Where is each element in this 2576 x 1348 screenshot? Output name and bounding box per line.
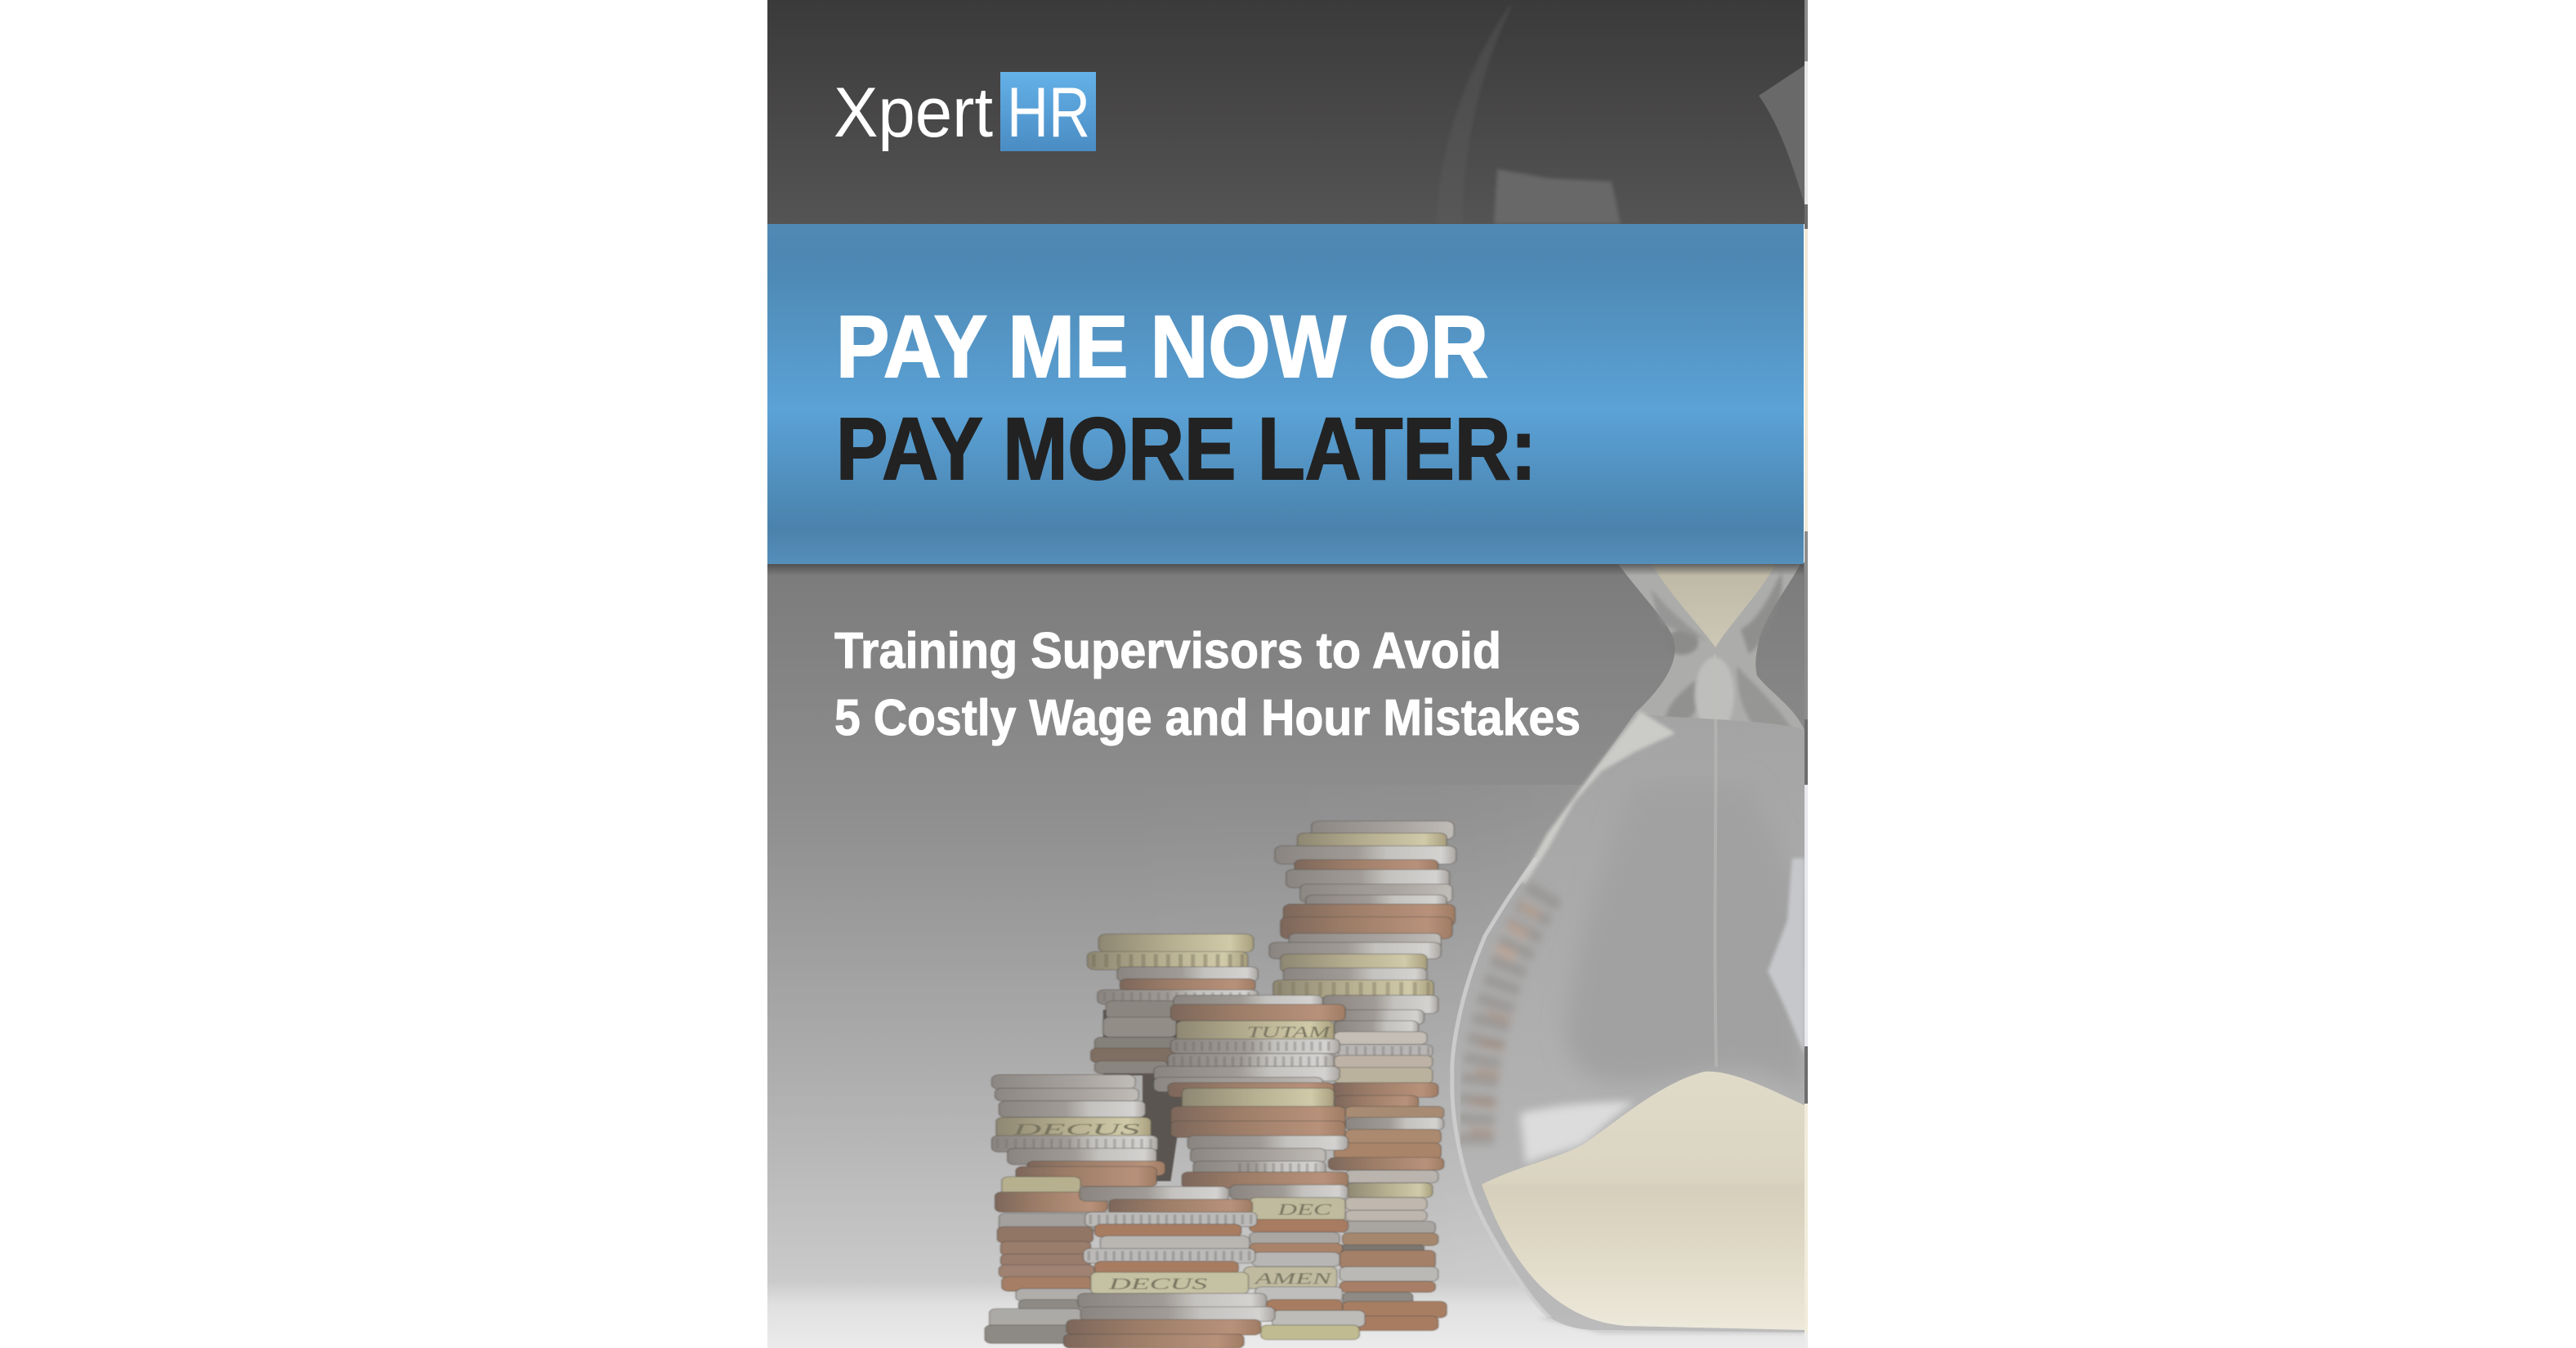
neck reflections <box>1652 575 1791 726</box>
title line 2: PAY MORE LATER: <box>836 399 1536 498</box>
subtitle <box>834 623 1581 746</box>
logo wordmark HR: HR <box>1007 74 1090 152</box>
engraved coin text: DEC <box>1277 1199 1332 1218</box>
hourglass <box>1452 564 1805 1334</box>
lower bulb glass <box>1452 714 1805 1332</box>
middle front coin stack <box>1154 995 1365 1340</box>
sand pile <box>1482 1072 1805 1330</box>
back middle coin stack <box>1088 934 1258 1073</box>
shadow gap behind stacks <box>1103 1010 1182 1181</box>
title line 1: PAY ME NOW OR <box>836 297 1488 396</box>
logo <box>834 72 1096 152</box>
coin stacks <box>985 821 1456 1348</box>
reflective floor <box>767 1282 1805 1348</box>
bright window above sand <box>1520 1102 1635 1164</box>
front coin stack <box>1064 1187 1275 1348</box>
logo box <box>1000 72 1096 151</box>
light falloff toward right <box>1062 785 1805 1283</box>
falling sand stream <box>1715 654 1716 1067</box>
right edge strip <box>1805 0 1808 1348</box>
left coin stack <box>985 1075 1165 1343</box>
back right coin stack <box>1269 821 1456 1331</box>
dark header background <box>767 0 1805 224</box>
lower grey background <box>767 562 1805 1286</box>
title band <box>767 224 1804 564</box>
subtitle line 2: 5 Costly Wage and Hour Mistakes <box>834 690 1581 746</box>
subtitle line 1: Training Supervisors to Avoid <box>834 623 1501 679</box>
logo wordmark Xpert: Xpert <box>834 74 993 152</box>
cover page <box>767 0 1808 1348</box>
bulb inner dark reflection <box>1569 870 1803 1082</box>
engraved coin text: DECUS <box>1012 1119 1140 1138</box>
glass shadow on floor <box>1536 1316 1805 1334</box>
coin reflection in glass <box>1475 887 1549 1144</box>
upper bulb sand <box>1652 564 1776 647</box>
bulb outer edge highlight <box>1452 858 1550 1318</box>
blue band shadow <box>767 564 1804 575</box>
title <box>836 297 1536 498</box>
engraved coin text: TUTAM <box>1247 1023 1332 1041</box>
hourglass right-side window reflection <box>1768 858 1805 1055</box>
engraved coin text: AMEN <box>1253 1269 1334 1288</box>
bright stripe below neck <box>1520 711 1675 883</box>
engraved coin text: DECUS <box>1107 1274 1207 1293</box>
shoulders and neck glass <box>1618 564 1805 730</box>
